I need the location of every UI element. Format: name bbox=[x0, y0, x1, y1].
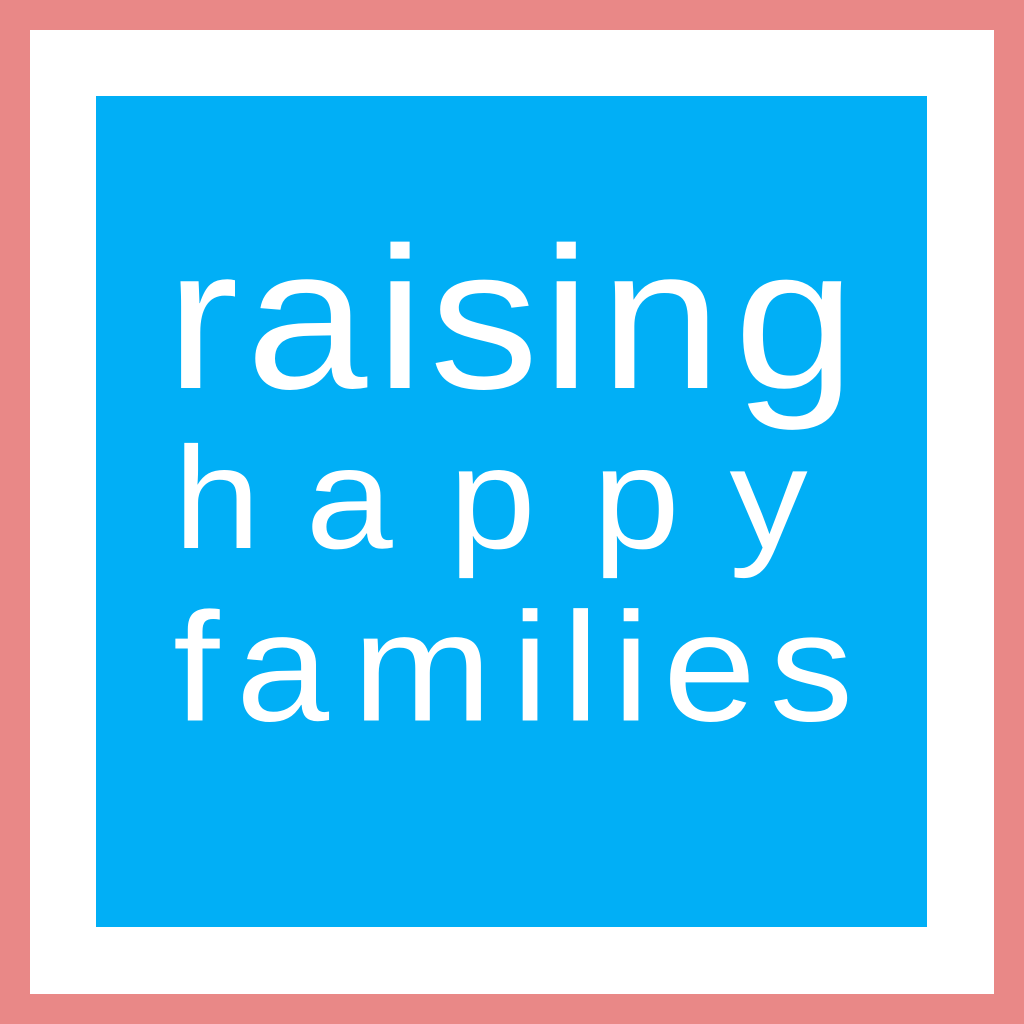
title line: families: families bbox=[173, 581, 853, 754]
title line: raising: raising bbox=[166, 205, 855, 431]
title line: happy: happy bbox=[173, 416, 808, 579]
panel: blue square bbox=[96, 96, 927, 927]
